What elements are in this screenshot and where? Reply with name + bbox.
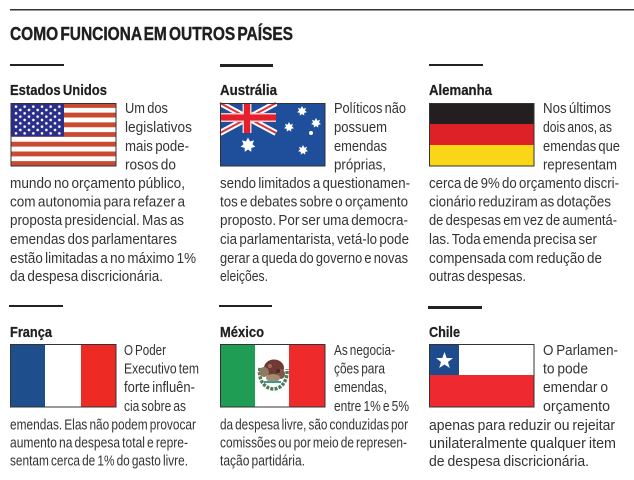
text: Alemanha: [429, 101, 620, 285]
text: Austrália: proposto. Por ser uma democra-: [220, 213, 408, 229]
text: França: forte influên-: [124, 380, 195, 396]
text: México: tação partidária.: [220, 454, 305, 470]
text: Chile: emendar o: [543, 380, 608, 396]
text: Austrália: eleições.: [220, 269, 268, 285]
icon: flag of Australia: [220, 103, 325, 166]
heading: Chile: Chile: [429, 324, 460, 341]
title: COMO FUNCIONA EM OUTROS PAÍSES: [10, 23, 293, 44]
text: Alemanha: compensada com redução de: [429, 251, 602, 267]
text: França: O Poder: [124, 343, 166, 359]
icon: coat of arms: [259, 360, 287, 389]
text: Alemanha: Nos últimos: [543, 101, 611, 117]
text: Chile: apenas para reduzir ou rejeitar: [429, 418, 615, 434]
text: Austrália: emendas: [334, 139, 387, 155]
icon: flag of Mexico: [220, 344, 325, 407]
heading: Estados Unidos: Estados Unidos: [10, 82, 107, 99]
heading: Austrália: Austrália: [220, 82, 278, 99]
text: Estados Unidos: com autonomia para refazer a: [10, 194, 186, 210]
text: Austrália: [220, 101, 410, 285]
text: Austrália: gerar a queda do governo e novas: [220, 251, 408, 267]
text: Alemanha: emendas que: [543, 139, 620, 155]
text: México: emendas,: [334, 380, 387, 396]
text: Austrália: possuem: [334, 120, 387, 136]
text: Austrália: próprias,: [334, 158, 386, 174]
text: Estados Unidos: emendas dos parlamentares: [10, 232, 177, 248]
panel: França: [9, 305, 199, 470]
text: Estados Unidos: rosos do: [125, 158, 176, 174]
text: França: Executivo tem: [124, 362, 199, 378]
panel: Alemanha: [429, 64, 620, 285]
top rule: [10, 9, 634, 10]
text: Chile: O Parlamen-: [543, 343, 618, 359]
text: Estados Unidos: [10, 101, 196, 285]
text: Austrália: tos e debates sobre o orçamento: [220, 194, 408, 210]
text: Chile: de despesa discricionária.: [429, 454, 589, 470]
text: Alemanha: cerca de 9% do orçamento discri-: [429, 176, 619, 192]
text: Estados Unidos: legislativos: [125, 120, 192, 136]
heading: Alemanha: Alemanha: [429, 82, 493, 99]
text: Chile: [429, 343, 618, 470]
text: Austrália: sendo limitados a questionamen-: [220, 176, 410, 192]
text: México: entre 1% e 5%: [334, 399, 409, 415]
icon: flag of France: [10, 344, 116, 407]
icon: flag of Chile: [429, 344, 534, 407]
panel: Chile: [428, 306, 618, 470]
text: Chile: unilateralmente qualquer item: [429, 436, 616, 452]
text: México: comissões ou por meio de represen-: [220, 436, 407, 452]
text: Chile: orçamento: [543, 399, 610, 415]
text: Alemanha: cionário reduziram as dotações: [429, 194, 611, 210]
text: Estados Unidos: proposta presidencial. Mas as: [10, 213, 184, 229]
icon: flag of the United States: [11, 103, 116, 166]
heading: México: México: [220, 324, 264, 341]
text: Austrália: Políticos não: [334, 101, 406, 117]
text: México: As negocia-: [334, 343, 395, 359]
text: Estados Unidos: estão limitadas a no máximo 1%: [10, 251, 196, 267]
text: França: sentam cerca de 1% do gasto livre.: [10, 454, 188, 470]
text: França: aumento na despesa total e repre-: [10, 436, 188, 452]
text: Alemanha: dois anos, as: [543, 120, 612, 136]
text: Estados Unidos: da despesa discricionária.: [10, 269, 163, 285]
text: Chile: to pode: [543, 362, 588, 378]
text: Alemanha: outras despesas.: [429, 269, 526, 285]
heading: França: França: [10, 324, 53, 341]
text: Estados Unidos: mundo no orçamento público,: [10, 176, 185, 192]
text: México: [220, 343, 409, 470]
text: Alemanha: de despesas em vez de aumentá-: [429, 213, 617, 229]
panel: México: [219, 305, 409, 470]
text: Estados Unidos: mais pode-: [125, 139, 189, 155]
panel: Austrália: [220, 64, 410, 285]
text: Estados Unidos: Um dos: [125, 101, 168, 117]
text: França: [10, 343, 199, 470]
panel: Estados Unidos: [10, 64, 196, 285]
text: França: cia sobre as: [124, 399, 186, 415]
icon: flag of Germany: [429, 103, 534, 166]
text: Austrália: cia parlamentarista, vetá-lo pode: [220, 232, 409, 248]
text: Alemanha: las. Toda emenda precisa ser: [429, 232, 597, 248]
text: México: da despesa livre, são conduzidas por: [220, 418, 408, 434]
text: Alemanha: representam: [543, 158, 617, 174]
text: França: emendas. Elas não podem provocar: [10, 418, 196, 434]
text: México: ções para: [334, 362, 386, 378]
